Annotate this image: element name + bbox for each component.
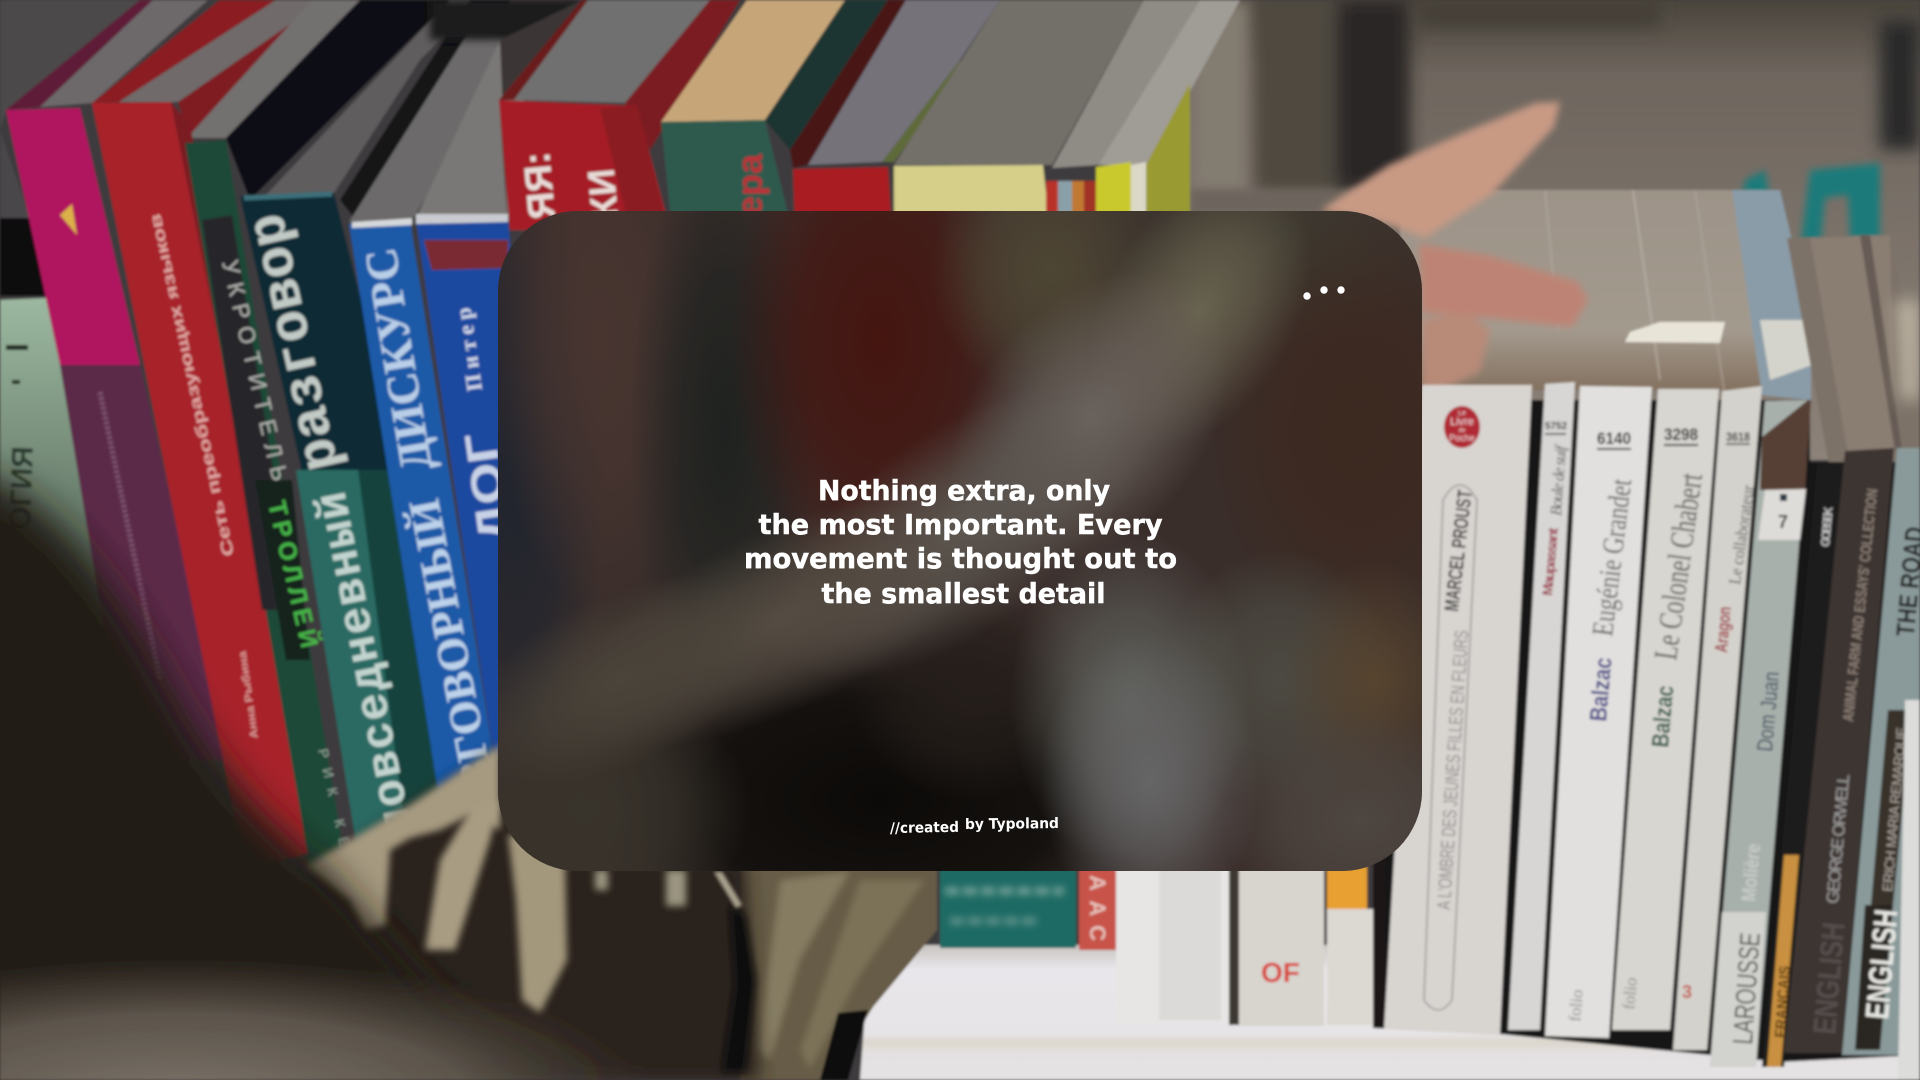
- book: Molière, Dom Juan, Larousse: [1710, 400, 1811, 1067]
- card headline text: the smallest detail: [822, 577, 1106, 610]
- book: black spine with orange Français band: GOBSEK: [1818, 506, 1836, 547]
- book: Le Livre de Poche, Marcel Proust: Poche: [1449, 433, 1475, 443]
- book: Le Livre de Poche, Marcel Proust: [1384, 385, 1532, 1035]
- book: Balzac, Le Colonel Chabert: folio: [1619, 977, 1641, 1010]
- book: Le Livre de Poche, Marcel Proust: MARCEL PROUST: [1441, 489, 1477, 613]
- book: Balzac, Le Colonel Chabert: 3298: [1664, 425, 1698, 444]
- book: dark blue spine, behind card: [416, 214, 560, 800]
- book: Aragon, Le collaborateur: Le collaborateur: [1725, 484, 1758, 586]
- book: dark green spine with troll title: ТРОЛЛЕЙ: [262, 498, 325, 651]
- upper left book pages: [0, 0, 1240, 230]
- lower shelf books below the card: OF: [1261, 957, 1300, 988]
- book: Balzac, Eugénie Grandet: 6140: [1597, 429, 1631, 448]
- small coloured spines near top centre: [1046, 83, 1190, 230]
- lower shelf books below the card: [940, 860, 1385, 1026]
- book: Balzac, Eugénie Grandet: Eugénie Grandet: [1586, 477, 1638, 638]
- book: Balzac, Eugénie Grandet: folio: [1565, 989, 1587, 1022]
- book: Balzac, Le Colonel Chabert: Le Colonel Chabert: [1648, 471, 1710, 662]
- book: dark green spine with troll title: [185, 140, 359, 880]
- book: Molière, Dom Juan, Larousse: LAROUSSE: [1727, 932, 1766, 1045]
- book: Remarque, The Road Back: ENGLISH: [1858, 908, 1905, 1021]
- book: Balzac, Le Colonel Chabert: Balzac: [1647, 684, 1679, 749]
- lower shelf surface: [860, 945, 1920, 1080]
- book: Balzac, Le Colonel Chabert: [1612, 389, 1719, 1030]
- book: Maupassant, Boule de suif: Boule de suif: [1548, 443, 1570, 516]
- hand reaching for a book: [1321, 102, 1588, 413]
- book: Aragon, Le collaborateur: 3618: [1726, 430, 1750, 444]
- book: Le Livre de Poche, Marcel Proust: Le: [1458, 410, 1466, 417]
- book: Balzac, Eugénie Grandet: [1545, 386, 1652, 1038]
- card headline text: [744, 474, 1177, 610]
- book: green spine with red title: ера: [729, 153, 770, 216]
- book: dark green spine with troll title: РИК КЕЙ: [315, 747, 359, 868]
- book: Le Livre de Poche, Marcel Proust: Livre: [1450, 416, 1474, 428]
- book: black spine with orange Français band: FRANÇAIS: [1772, 965, 1794, 1038]
- card blurred colour field: [498, 211, 1422, 871]
- book: Maupassant, Boule de suif: [1508, 382, 1575, 1030]
- book: Aragon, Le collaborateur: Aragon: [1711, 606, 1735, 653]
- card headline text: Nothing extra, only: [818, 474, 1110, 507]
- upper right shelf backdrop: [1130, 0, 1920, 460]
- book: Remarque, The Road Back: [1842, 448, 1920, 1080]
- card credit line: //created: [890, 820, 959, 837]
- book: navy and teal spine: разговор: [238, 208, 355, 477]
- card credit line: by Typoland: [965, 816, 1059, 833]
- page blocks of right books: [1400, 190, 1920, 470]
- book: dark blue spine, behind card: ДОГ: [456, 430, 520, 545]
- book: Orwell, Animal Farm: ANIMAL FARM AND ESSAYS' COLLECTION: [1840, 488, 1881, 722]
- teal object behind right books: [1738, 163, 1880, 250]
- book: Balzac, Eugénie Grandet: Balzac: [1585, 656, 1618, 723]
- book: pale green, far left: ОГИЯ: [4, 446, 40, 530]
- book: Aragon, Le collaborateur: [1673, 386, 1762, 1050]
- book: red hardcover: КИ: [581, 167, 627, 221]
- blurred foreground hair: [0, 470, 700, 1080]
- book: Molière, Dom Juan, Larousse: Molière: [1738, 843, 1765, 902]
- book: blue spine: ДИСКУРС: [354, 244, 442, 475]
- jacket sleeve and fingers in foreground: [300, 745, 937, 1080]
- book: navy and teal spine: [238, 193, 450, 880]
- book: yellow cream spine: [894, 165, 1050, 230]
- book: Le Livre de Poche, Marcel Proust: de: [1459, 428, 1466, 434]
- book: blue spine: ЗГОВОРНЫЙ: [399, 495, 502, 789]
- book: red hardcover: ЯЯ:: [516, 150, 564, 221]
- book: pale green, far left: [0, 130, 130, 700]
- book: Orwell, Animal Farm: GEORGE ORWELL: [1823, 773, 1853, 904]
- panel: frosted glass card: [498, 211, 1422, 871]
- book: dark blue spine, behind card: Питер: [451, 306, 487, 393]
- book: red spine: [92, 102, 330, 870]
- book: Maupassant, Boule de suif: Maupassant: [1539, 527, 1561, 596]
- gap shadow behind right-hand books: [1373, 400, 1920, 1062]
- book: Maupassant, Boule de suif: 5752: [1545, 421, 1567, 432]
- book: Molière, Dom Juan, Larousse: 7: [1778, 512, 1788, 532]
- card headline text: movement is thought out to: [744, 542, 1177, 575]
- book: Orwell, Animal Farm: [1784, 448, 1894, 1053]
- book: navy and teal spine: повседневный: [307, 487, 426, 840]
- book: black spine with orange Français band: [1762, 465, 1845, 1067]
- book: magenta spine: [6, 108, 230, 760]
- book: low red spine: [793, 167, 892, 230]
- book: green spine with red title: [661, 120, 792, 230]
- book: red hardcover: [499, 100, 670, 230]
- book: Remarque, The Road Back: ERICH MARIA REMARQUE: [1879, 726, 1909, 892]
- book: Molière, Dom Juan, Larousse: Dom Juan: [1752, 671, 1784, 752]
- icon: three dots: [1303, 286, 1345, 300]
- card headline text: the most Important. Every: [758, 508, 1162, 541]
- book: red spine: Сеть преобразующих языков: [147, 212, 238, 558]
- book: Le Livre de Poche, Marcel Proust: A L'OMBRE DES JEUNES FILLES EN FLEURS: [1434, 630, 1473, 910]
- book: dark green spine with troll title: УКРОТИТЕЛЬ: [217, 257, 293, 483]
- book: Aragon, Le collaborateur: 3: [1682, 982, 1692, 1002]
- card credit line: [890, 816, 1059, 837]
- book: Orwell, Animal Farm: ENGLISH: [1806, 921, 1852, 1036]
- book: blue spine: [349, 218, 502, 830]
- lower shelf books below the card: ААС: [1085, 875, 1110, 941]
- book: red spine: Анна Рыбина: [237, 649, 261, 739]
